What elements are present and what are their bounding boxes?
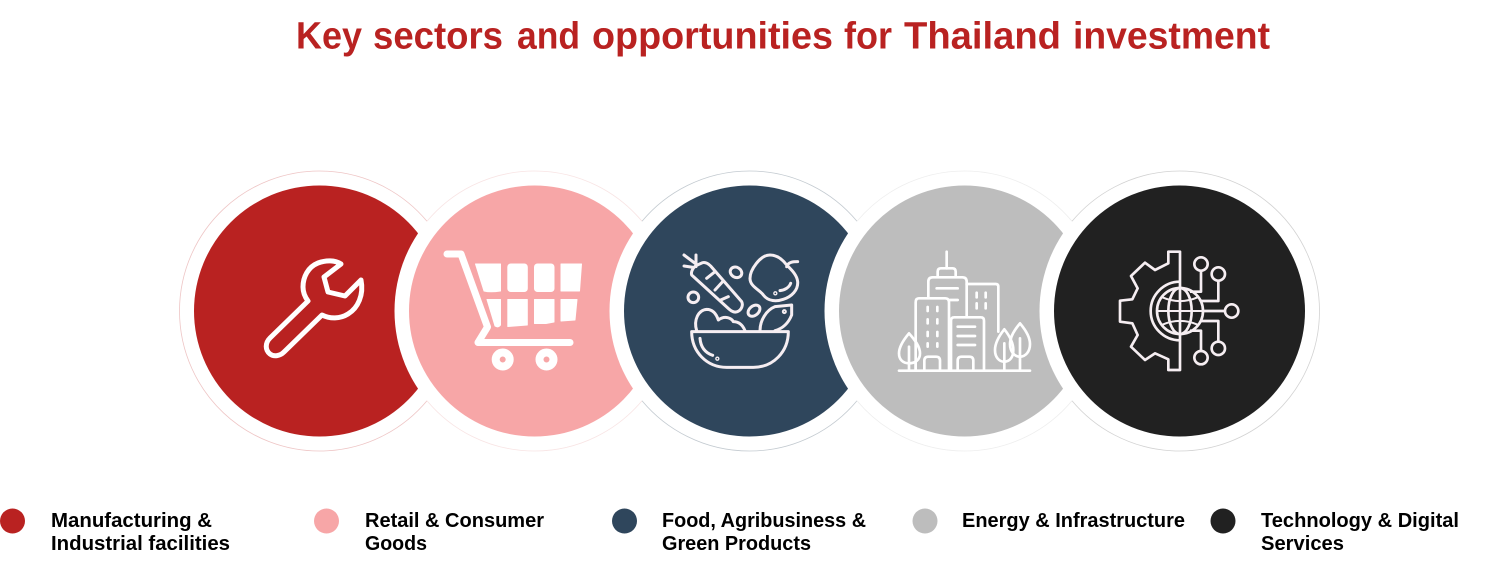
legend: technology: Technology & Digital <box>1261 510 1459 532</box>
legend: energy: Energy & Infrastructure <box>962 510 1185 532</box>
title: Key <box>296 16 362 58</box>
panel: food circle <box>610 171 890 451</box>
legend: retail <box>314 508 544 555</box>
panel: technology circle <box>1040 171 1320 451</box>
legend: manufacturing: Manufacturing & <box>51 510 212 532</box>
title: opportunities <box>592 16 833 58</box>
icon: wrench <box>266 261 362 356</box>
legend: food: Green Products <box>662 533 811 555</box>
icon: city buildings <box>899 252 1030 371</box>
title: investment <box>1073 16 1270 58</box>
legend: technology <box>1210 508 1459 555</box>
title: Thailand <box>904 16 1061 58</box>
title: and <box>517 16 580 58</box>
legend: manufacturing: Industrial facilities <box>51 533 230 555</box>
panel: retail circle <box>394 171 674 451</box>
legend: manufacturing <box>0 508 230 555</box>
legend: retail: Goods <box>365 533 427 555</box>
legend: retail: Retail & Consumer <box>365 510 544 532</box>
icon: shopping cart <box>447 254 582 366</box>
icon: food bowl <box>684 255 798 367</box>
legend: technology: Services <box>1261 533 1344 555</box>
title: for <box>844 16 892 58</box>
panel: energy circle <box>824 171 1104 451</box>
icon: gear and globe circuit <box>1120 252 1238 370</box>
panel: manufacturing circle <box>180 171 460 451</box>
title: sectors <box>373 16 503 58</box>
legend: food <box>612 508 866 555</box>
legend: food: Food, Agribusiness & <box>662 510 866 532</box>
